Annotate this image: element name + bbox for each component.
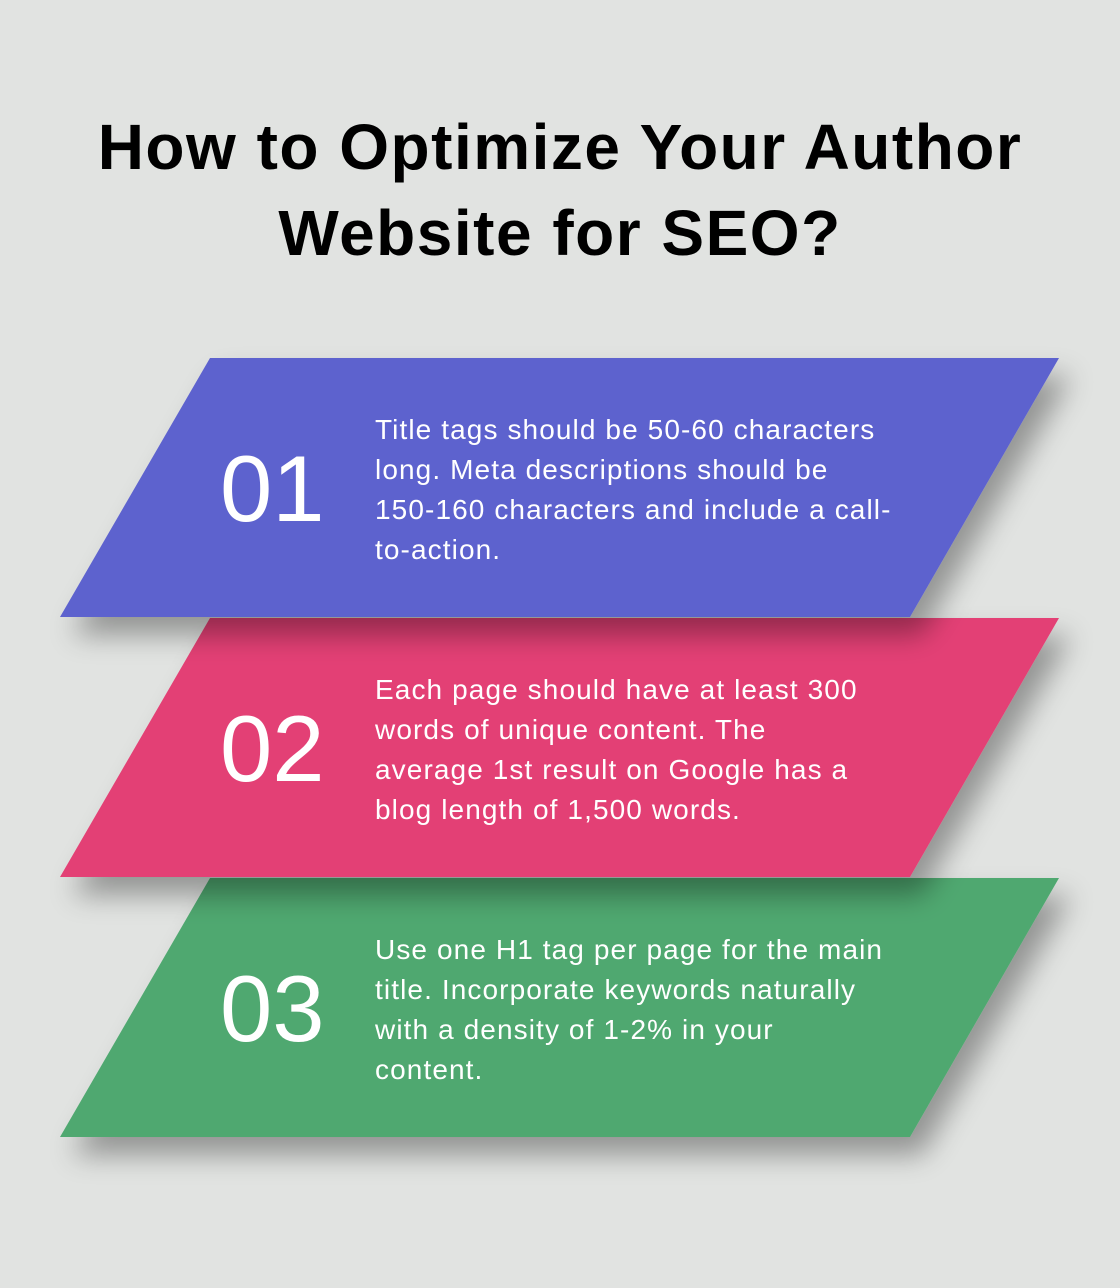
title: How to Optimize Your Author: [98, 111, 1022, 183]
number 01: 01: [220, 436, 325, 541]
panel 1: [220, 414, 892, 565]
text 2: [375, 674, 858, 825]
panel 2 shape: [60, 618, 1059, 877]
text 1: [375, 414, 892, 565]
text 1: 150-160 characters and include a call-: [375, 494, 892, 525]
panel 1 shape: [60, 358, 1059, 617]
text 3: title. Incorporate keywords naturally: [375, 974, 856, 1005]
panel 2: [220, 674, 858, 825]
text 3: [375, 934, 883, 1085]
panel 3: [220, 934, 883, 1085]
number 03: 03: [220, 956, 325, 1061]
text 3: content.: [375, 1054, 483, 1085]
panel 3 shape: [60, 878, 1059, 1137]
text 3: Use one H1 tag per page for the main: [375, 934, 883, 965]
text 1: to-action.: [375, 534, 501, 565]
text 1: long. Meta descriptions should be: [375, 454, 828, 485]
text 2: words of unique content. The: [375, 714, 766, 745]
title: Website for SEO?: [278, 197, 842, 269]
text 1: Title tags should be 50-60 characters: [375, 414, 875, 445]
number 02: 02: [220, 696, 325, 801]
text 2: blog length of 1,500 words.: [375, 794, 741, 825]
text 2: average 1st result on Google has a: [375, 754, 848, 785]
text 3: with a density of 1-2% in your: [375, 1014, 774, 1045]
text 2: Each page should have at least 300: [375, 674, 858, 705]
title: [98, 111, 1022, 269]
